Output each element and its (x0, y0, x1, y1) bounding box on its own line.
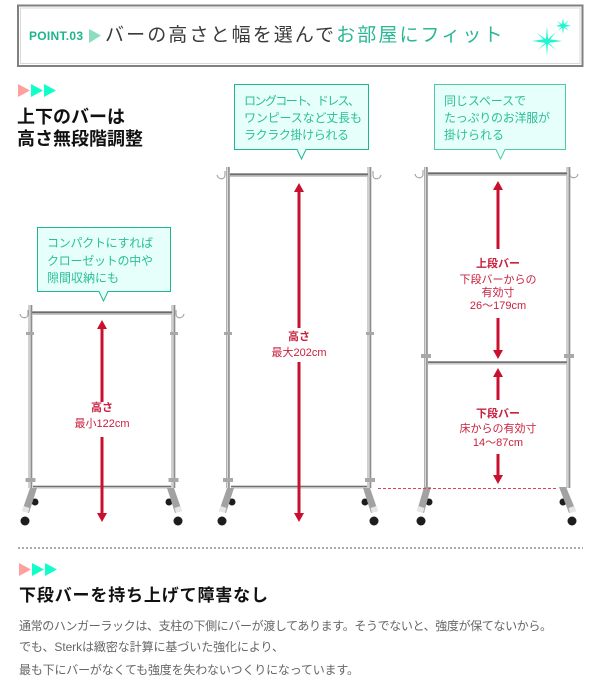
callout: same space: 掛けられる (444, 127, 504, 142)
arrow: lower bar down (493, 454, 503, 484)
body text: でも、Sterkは緻密な計算に基づいた強化により、 (19, 639, 284, 654)
label: lower bar: 下段バー (476, 406, 520, 420)
label: min height: 最小122cm (74, 417, 130, 430)
title: バーの高さと幅を選んでお部屋にフィット (105, 24, 505, 46)
callout: same space: 同じスペースで (444, 94, 526, 108)
label: upper bar: 有効寸 (482, 285, 514, 299)
heading: section 1: 上下のバーは (17, 107, 125, 127)
callout: compact: コンパクトにすれば (47, 236, 153, 250)
label: max height (271, 329, 327, 359)
label: upper bar (460, 256, 536, 312)
body text: 最も下にバーがなくても強度を失わないつくりになっています。 (19, 662, 359, 677)
icon: header triangle (89, 29, 101, 43)
label: upper bar: 26〜179cm (470, 300, 526, 312)
callout: long coat (234, 84, 368, 159)
header panel (18, 6, 582, 66)
dashed floor line (378, 488, 557, 490)
arrow: lower bar up (493, 368, 503, 400)
label: min height: 高さ (91, 400, 113, 414)
heading: section 2: 下段バーを持ち上げて障害なし (19, 585, 268, 605)
callout: long coat: ラクラク掛けられる (244, 127, 349, 142)
heading: section 1 (17, 107, 143, 149)
rack: double bar (415, 167, 578, 526)
arrow: upper bar up (493, 181, 503, 249)
label: min height (74, 400, 130, 430)
arrow: low rack up (97, 320, 107, 402)
callout: same space: たっぷりのお洋服が (444, 110, 550, 125)
label: max height: 最大202cm (271, 345, 327, 359)
label: upper bar: 上段バー (476, 256, 520, 270)
arrow: tall rack up (294, 183, 304, 328)
triangles: section 2 (19, 563, 57, 576)
callout: compact: 隙間収納にも (47, 270, 119, 285)
callout: same space (434, 84, 566, 159)
label: lower bar: 14〜87cm (473, 437, 523, 449)
body text (19, 618, 552, 677)
callout: compact (38, 228, 170, 301)
heading: section 1: 高さ無段階調整 (17, 129, 143, 149)
label: lower bar: 床からの有効寸 (460, 421, 536, 435)
arrow: tall rack down (294, 362, 304, 522)
callout: long coat: ワンピースなど丈長も (244, 111, 362, 125)
callout: long coat: ロングコート、ドレス、 (244, 94, 360, 108)
triangles: section 1 (18, 84, 56, 97)
arrow: upper bar down (493, 318, 503, 359)
point number: POINT.03 (29, 29, 83, 43)
label: lower bar (460, 406, 536, 449)
rack: low (20, 305, 184, 526)
label: upper bar: 下段バーからの (460, 272, 536, 286)
callout: compact: クローゼットの中や (47, 253, 153, 268)
arrow: low rack down (97, 437, 107, 522)
label: max height: 高さ (288, 329, 310, 343)
body text: 通常のハンガーラックは、支柱の下側にバーが渡してあります。そうでないと、強度が保てないから。 (19, 618, 552, 633)
icon: sparkles (532, 18, 571, 56)
rack: tall (217, 167, 381, 526)
